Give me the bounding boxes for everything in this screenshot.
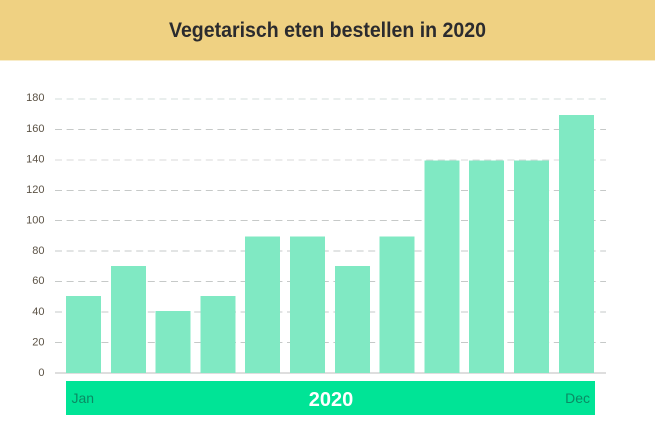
title: Vegetarisch eten bestellen in 2020	[169, 19, 486, 42]
y axis labels: 20	[32, 336, 44, 348]
y axis labels: 120	[26, 184, 44, 196]
y axis labels: 160	[26, 123, 44, 135]
bar chart	[66, 115, 594, 373]
y axis labels: 80	[32, 245, 44, 257]
y axis labels: 180	[26, 92, 44, 104]
y axis labels: 0	[38, 367, 44, 379]
label: 2020: 2020	[309, 389, 353, 411]
y axis labels: 40	[32, 306, 44, 318]
y axis labels: 140	[26, 154, 44, 166]
y axis labels	[26, 92, 44, 379]
label: Dec: Dec	[565, 390, 590, 406]
label: Jan: Jan	[72, 390, 94, 406]
x axis band	[66, 381, 595, 415]
header banner	[0, 0, 655, 61]
y axis labels: 60	[32, 275, 44, 287]
y axis labels: 100	[26, 214, 44, 226]
